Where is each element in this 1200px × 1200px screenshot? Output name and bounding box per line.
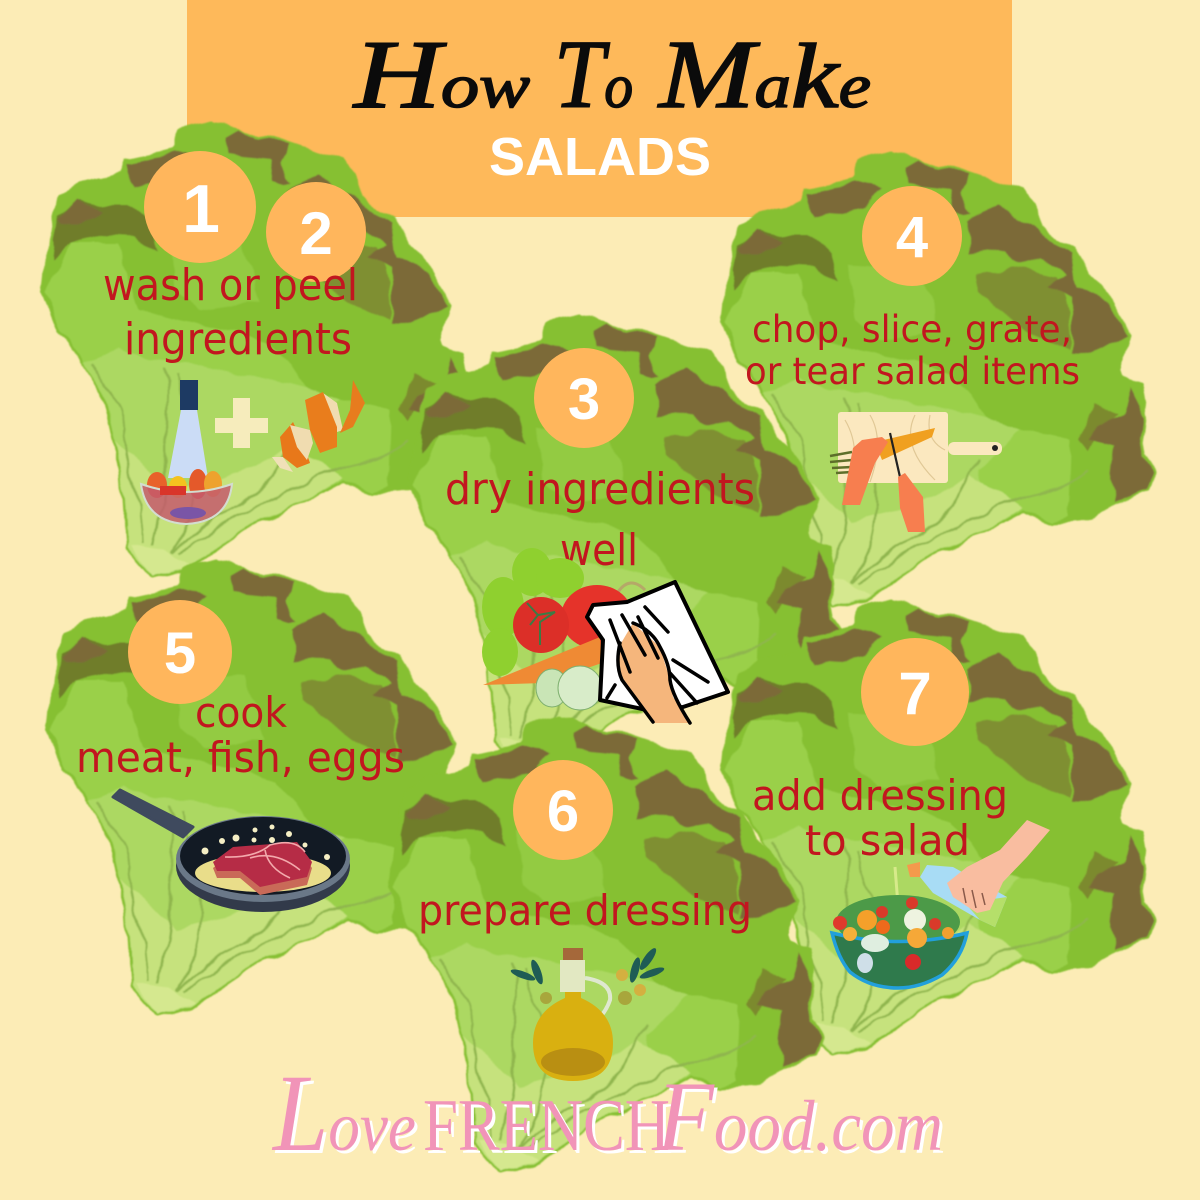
step 6 text: prepare dressing xyxy=(418,886,752,935)
step 4 badge xyxy=(862,186,962,286)
step 7 text: to salad xyxy=(805,816,970,865)
step 7 badge: 7 xyxy=(898,660,932,727)
subtitle: SALADS: SALADS xyxy=(489,127,711,187)
step 7 badge xyxy=(861,638,969,746)
step 5 badge xyxy=(128,600,232,704)
step 1-2 text: wash or peel xyxy=(103,260,358,311)
icon: water spray over fruit bowl xyxy=(141,380,232,524)
step 5 text: meat, fish, eggs xyxy=(76,733,405,782)
title: How To Make: Make xyxy=(657,21,871,129)
step 3 badge: 3 xyxy=(568,367,600,432)
icon: frying pan with steak xyxy=(113,790,350,912)
footer: website name: FRENCH xyxy=(423,1085,670,1167)
step 5 badge: 5 xyxy=(164,621,196,686)
step 1-2 text xyxy=(103,260,358,365)
leaf: step 3 xyxy=(413,316,840,770)
step 4 text: or tear salad items xyxy=(745,350,1080,393)
leaf: step 5 xyxy=(50,561,477,1015)
step 3 text xyxy=(445,464,755,576)
step 3 badge xyxy=(534,348,634,448)
step 4 text xyxy=(745,308,1080,393)
step 3 text: dry ingredients xyxy=(445,464,755,515)
step 4 text: chop, slice, grate, xyxy=(752,308,1072,351)
icon: salad bowl and hand pouring dressing xyxy=(832,820,1050,988)
title: How To Make xyxy=(352,21,871,129)
footer: website name: FRENCH xyxy=(426,1088,673,1170)
title: How To Make: H ow xyxy=(352,21,530,129)
step 1 badge: 1 xyxy=(182,171,220,247)
title banner xyxy=(187,0,1012,217)
step 1-2 text: ingredients xyxy=(124,314,352,365)
footer: website name: Love xyxy=(271,1052,416,1174)
step 7 text xyxy=(752,771,1008,865)
title: How To Make: To xyxy=(554,21,633,129)
leaf: step 1 and 2 xyxy=(45,123,472,577)
footer: website name xyxy=(271,1052,946,1177)
step 6 badge xyxy=(513,760,613,860)
step 2 badge xyxy=(266,182,366,282)
icon: vegetables with towel and hand xyxy=(482,548,728,723)
leaf: step 4 xyxy=(725,153,1152,607)
footer: website name: Love xyxy=(274,1055,419,1177)
step 1 badge xyxy=(144,151,256,263)
step 5 text: cook xyxy=(195,688,288,737)
icon: plus sign xyxy=(215,398,268,448)
icon: cutting board with hands and knife xyxy=(830,412,1002,532)
step 6 badge: 6 xyxy=(547,779,579,844)
leaf: step 7 xyxy=(725,601,1152,1055)
step 5 text xyxy=(76,688,405,782)
icon: olive oil bottle with olives xyxy=(510,946,665,1081)
step 4 badge: 4 xyxy=(896,205,928,270)
step 2 badge: 2 xyxy=(299,200,333,267)
icon: orange peel xyxy=(272,380,365,472)
footer: website name: Food.com xyxy=(656,1061,943,1172)
step 7 text: add dressing xyxy=(752,771,1008,820)
step 3 text: well xyxy=(560,525,638,576)
footer: website name: Food.com xyxy=(659,1064,946,1175)
leaf: step 6 xyxy=(393,718,820,1172)
